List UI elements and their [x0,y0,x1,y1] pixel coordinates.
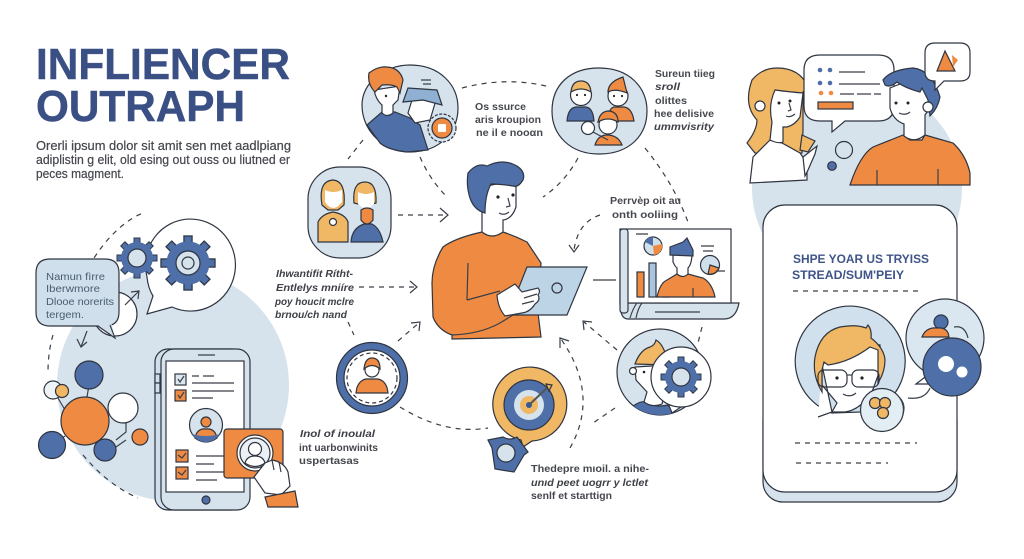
text: center labels: aris kroupion [475,114,541,126]
text: laptop label: Perrvèp oit au [610,195,681,207]
presenter [657,238,715,297]
woman [747,68,817,183]
panel: top-right group circle [552,68,647,154]
text: left middle label: Ihwantifit Rítht- [276,268,353,280]
text: target label: senlf et starttign [531,490,612,502]
title: INFLIENCER [36,40,290,89]
thought dots [828,142,852,170]
text: left middle label: Entlelys mniíre [276,282,354,294]
intro text: Orerli ipsum dolor sit amit sen met aadlpiang [36,139,291,153]
text: top-right label: sroll [655,81,681,93]
network diagram [38,361,148,461]
pie charts [644,237,725,274]
text: left middle label [274,268,354,321]
text: target label: unıd peet uogrr y lctlet [531,477,649,489]
text: phone label: Inol of inoulal [300,428,376,440]
card heading: SHPE YOAR US TRYISS [793,252,929,266]
text: center labels: Os ssurce [475,101,526,113]
panel: top-left duo circle [362,65,458,152]
avatar [190,408,222,442]
image bubble [925,43,970,90]
note bubble [36,259,119,338]
panel: right conversation scene [747,43,970,293]
title: OUTRAPH [36,82,245,131]
text: phone label: uspertasas [299,455,359,467]
card heading: STREAD/SUM'PEIY [792,268,904,282]
note bubble: tergem. [46,309,84,321]
text: laptop label [610,195,681,221]
intro text [36,139,291,181]
text: top-right label: olittes [655,95,687,107]
text: top-right label: hee delisive [654,108,714,120]
panel: laptop analytics [620,229,739,319]
linked chat circles [900,299,984,414]
note bubble: Dlooe norerits [46,296,114,308]
panel: target goal pin [488,367,567,472]
note bubble: Namun fìrre [46,271,105,283]
title [36,40,290,131]
checklist rows [175,374,234,480]
arrow down [77,331,87,347]
text: top-right label [654,68,715,133]
intro text: adiplistin g elit, old esing out ouss ou liutned er [36,153,290,167]
panel: left pair portrait [308,167,391,258]
phone checklist [155,349,298,510]
orange profile card with hand [224,429,298,507]
note bubble: Iberwmore [46,283,100,295]
panel: left process illustration [36,212,298,510]
text: left middle label: poy houcit mclre [274,296,354,308]
chat bubble [804,55,894,132]
panel: gear support circle [617,329,711,418]
bar chart [637,263,669,297]
card heading [792,252,929,282]
text: center labels: ne il e nooαn [476,127,543,139]
text: target label: Thedepre mıoil. a nihe- [531,463,650,475]
text: target label [531,463,650,502]
text: top-right label: Sureun tiieg [655,68,715,80]
text: laptop label: onth ooliing [612,209,678,221]
badge [488,437,528,472]
portrait [795,306,905,417]
panel: right survey card [763,205,984,502]
connector arrows [348,82,702,448]
text: phone label: int uarbonwinits [299,442,378,454]
panel: profile badge [336,342,408,414]
speech bubble with gears [117,219,235,314]
text: center labels [475,101,543,139]
man [850,68,970,185]
central person with tablet [432,162,587,339]
small white loop arrow [93,291,139,336]
intro text: peces magment. [36,167,124,181]
text: top-right label: ummvisrity [654,121,715,133]
small orange nodes bubble [860,388,904,432]
text: left middle label: brnou/ch nand [275,309,348,321]
text: phone label [299,428,378,467]
